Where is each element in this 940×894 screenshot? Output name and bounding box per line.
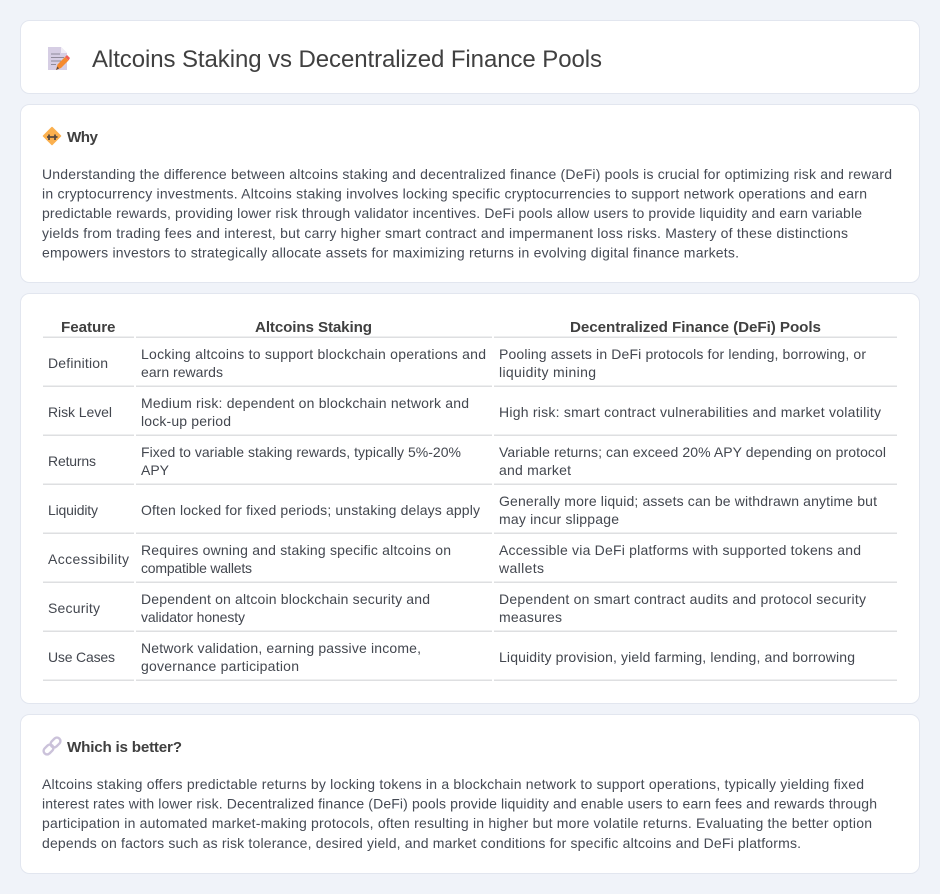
table row: risk level: High risk: smart contract vulnerabilities and market volatility xyxy=(499,404,881,420)
table row: definition: Pooling assets in DeFi protocols for lending, borrowing, or xyxy=(499,346,866,362)
text block: why explanation: yields from trading fees and interest, but carry higher smart contract and impermanent loss risks. Mastery of these distinctions xyxy=(42,225,848,241)
table row: risk level: Risk Level xyxy=(48,404,112,420)
text block: which is better explanation: Altcoins staking offers predictable returns by locking tokens in a blockchain network to support operations, typically yielding fixed xyxy=(42,776,864,792)
table row: accessibility: compatible wallets xyxy=(141,560,252,576)
text block: which is better explanation xyxy=(42,776,877,851)
text block: why explanation: Understanding the difference between altcoins staking and decentralized finance (DeFi) pools is crucial for optimizing risk and reward xyxy=(42,166,892,182)
table row: use cases: Network validation, earning passive income, xyxy=(141,640,421,656)
table row: security: validator honesty xyxy=(141,609,245,625)
table row: security: Dependent on altcoin blockchain security and xyxy=(141,591,430,607)
table row: use cases xyxy=(48,640,855,674)
table row: returns: and market xyxy=(499,462,571,478)
table row: risk level xyxy=(48,395,881,429)
text block: why explanation xyxy=(42,166,892,260)
text block: which is better explanation: depends on factors such as risk tolerance, desired yield, and market conditions for specific altcoins and DeFi platforms. xyxy=(42,835,801,851)
text block: why explanation: predictable rewards, providing lower risk through validator incentives. DeFi pools allow users to provide liquidity and earn variable xyxy=(42,205,862,221)
table row: returns: Variable returns; can exceed 20% APY depending on protocol xyxy=(499,444,886,460)
table row: definition: liquidity mining xyxy=(499,364,596,380)
table row: security: Dependent on smart contract audits and protocol security xyxy=(499,591,866,607)
text block: why explanation: empowers investors to strategically allocate assets for maximizing returns in evolving digital finance markets. xyxy=(42,244,739,260)
title: Altcoins Staking vs Decentralized Finance Pools xyxy=(92,46,602,73)
table row: definition: Locking altcoins to support blockchain operations and xyxy=(141,346,486,362)
table row: returns: APY xyxy=(141,462,170,478)
table row: use cases: Liquidity provision, yield farming, lending, and borrowing xyxy=(499,649,855,665)
panel: title header xyxy=(20,20,920,94)
table row: risk level: Medium risk: dependent on blockchain network and xyxy=(141,395,469,411)
table row: liquidity: Liquidity xyxy=(48,502,98,518)
text block: why explanation: in cryptocurrency investments. Altcoins staking involves locking specific cryptocurrencies to support network operations and earn xyxy=(42,186,867,202)
icon: orange diamond warning sign xyxy=(44,128,60,144)
table row: security xyxy=(48,591,866,625)
table header row: Feature xyxy=(61,319,116,336)
table row: definition: earn rewards xyxy=(141,364,223,380)
table header row: Altcoins Staking xyxy=(255,319,372,336)
table row: use cases: Use Cases xyxy=(48,649,115,665)
table row: returns: Returns xyxy=(48,453,96,469)
table row: accessibility: wallets xyxy=(498,560,544,576)
text block: which is better explanation: interest rates with lower risk. Decentralized finance (DeFi) pools provide liquidity and enable users to earn fees and rewards through xyxy=(42,796,877,812)
table row: liquidity: Often locked for fixed periods; unstaking delays apply xyxy=(141,502,480,518)
table row: accessibility: Accessibility xyxy=(48,551,129,567)
table row: risk level: lock-up period xyxy=(141,413,231,429)
text block: which is better explanation: participation in automated market-making protocols, often resulting in higher but more volatile returns. Evaluating the better option xyxy=(42,815,872,831)
table row: returns xyxy=(48,444,886,478)
table row: definition xyxy=(48,346,866,380)
table row: accessibility: Requires owning and staking specific altcoins on xyxy=(141,542,451,558)
icon: memo with pencil xyxy=(48,47,70,70)
heading: which is better: Which is better? xyxy=(67,739,182,756)
table row: security: measures xyxy=(499,609,562,625)
heading: why: Why xyxy=(67,129,99,146)
table row: definition: Definition xyxy=(48,355,108,371)
table header row xyxy=(61,319,821,336)
table row: accessibility: Accessible via DeFi platforms with supported tokens and xyxy=(499,542,861,558)
table row: use cases: governance participation xyxy=(141,658,299,674)
icon: chain link xyxy=(42,736,62,756)
table row: returns: Fixed to variable staking rewards, typically 5%-20% xyxy=(141,444,461,460)
table row: security: Security xyxy=(48,600,100,616)
panel: comparison table xyxy=(20,294,920,704)
table header row: Decentralized Finance (DeFi) Pools xyxy=(570,319,821,336)
table row: liquidity: Generally more liquid; assets can be withdrawn anytime but xyxy=(499,493,877,509)
table row: liquidity xyxy=(48,493,877,527)
table row: accessibility xyxy=(48,542,861,576)
panel: why xyxy=(20,104,920,282)
table row: liquidity: may incur slippage xyxy=(499,511,619,527)
panel: which is better xyxy=(20,714,920,874)
